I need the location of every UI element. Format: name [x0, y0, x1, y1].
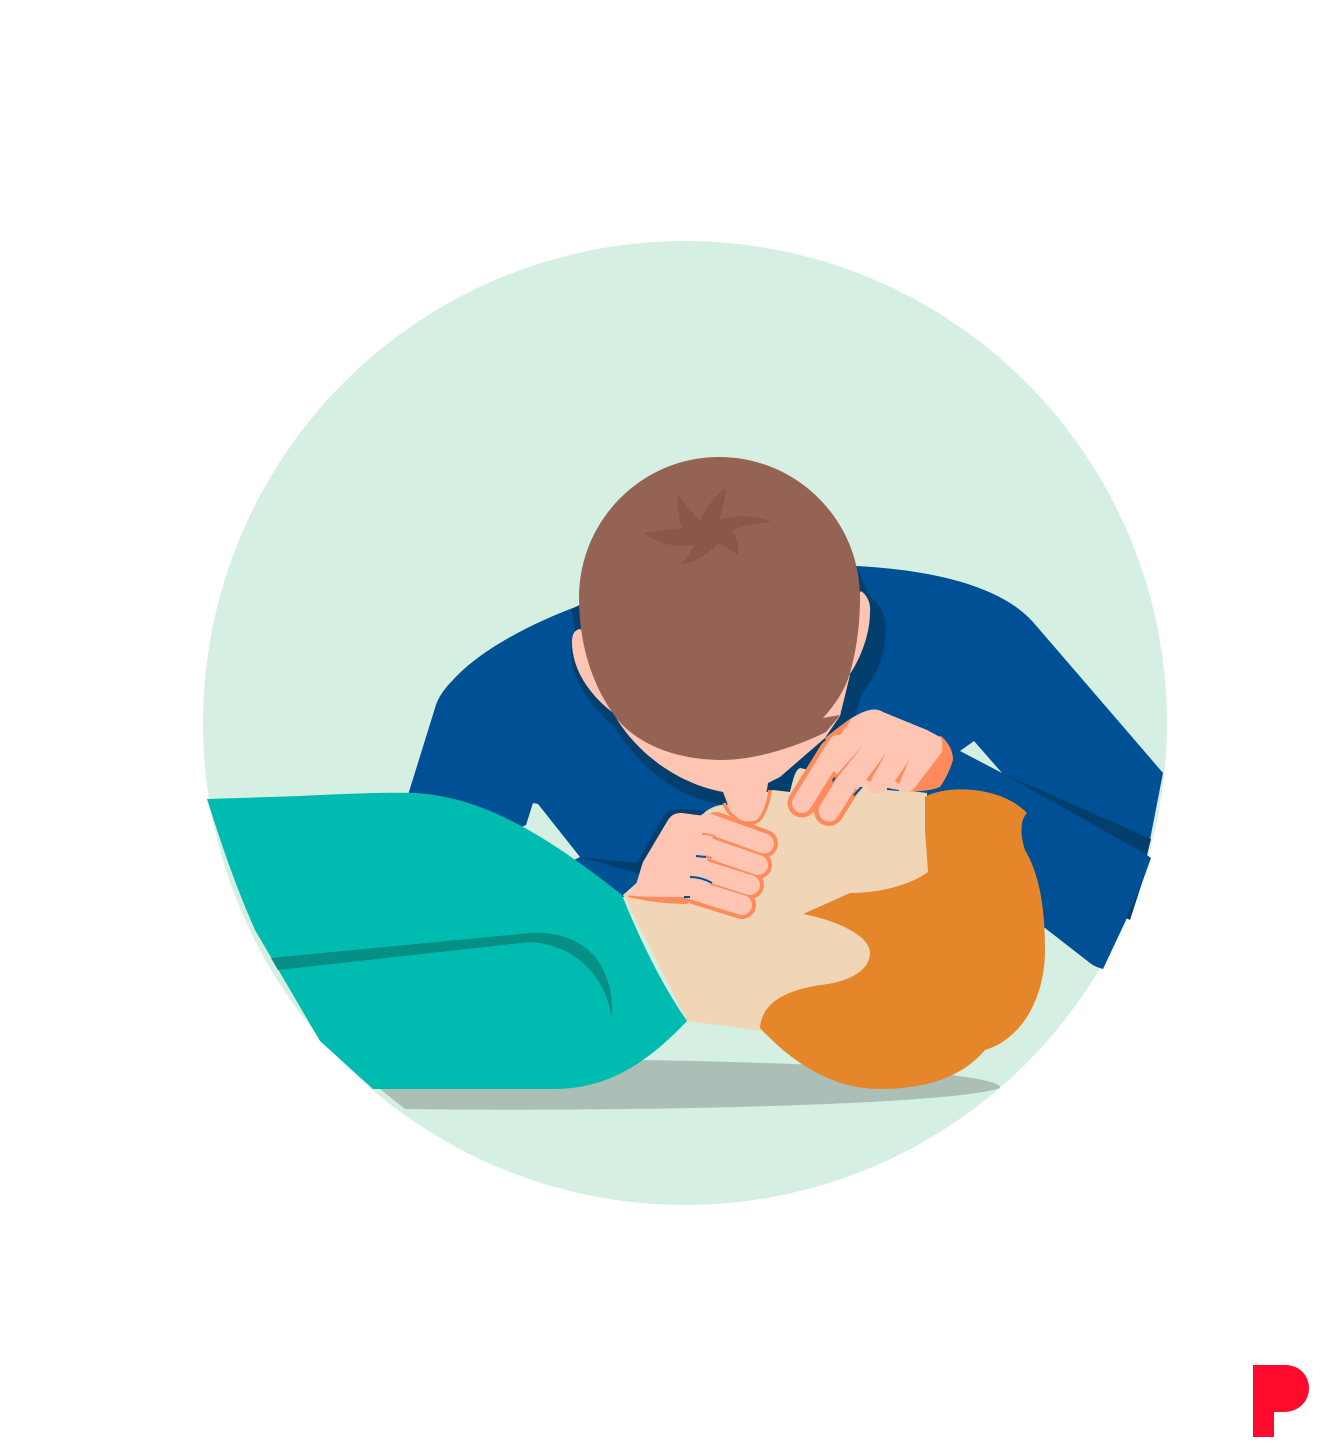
thumb side edge: [887, 736, 953, 791]
rescuer face: [613, 675, 850, 792]
patient: [207, 768, 1045, 1089]
rescuer torso and arms: [408, 566, 1163, 969]
hair swirl: [644, 487, 772, 565]
finger skin: [687, 823, 764, 905]
hand back edge: [825, 717, 853, 752]
finger separators: [702, 834, 716, 858]
blue finger gaps: [684, 856, 712, 897]
finger skin: [802, 745, 838, 803]
shirt fold: [271, 933, 612, 1018]
ground shadow: [380, 1060, 1000, 1110]
rescuer: [408, 457, 1163, 969]
rescuer head shadow: [571, 540, 886, 805]
left hand on chin: [623, 813, 764, 905]
finger outlines: [802, 753, 833, 803]
rescuer ears: [572, 591, 870, 712]
palm: [623, 813, 716, 897]
finger outlines: [697, 826, 764, 905]
patient hair: [760, 789, 1045, 1089]
logo: red P: [1253, 1365, 1309, 1437]
rescuer nose: [723, 780, 770, 823]
patient neck and face: [623, 768, 930, 1032]
rescuer hair: [579, 457, 860, 760]
wrist edge: [628, 895, 695, 904]
background circle: [203, 241, 1167, 1205]
finger separators: [831, 745, 909, 784]
blue finger gaps: [832, 777, 899, 796]
hand skin: [822, 710, 942, 793]
patient shirt: [207, 793, 687, 1089]
right hand on forehead: [802, 710, 953, 811]
